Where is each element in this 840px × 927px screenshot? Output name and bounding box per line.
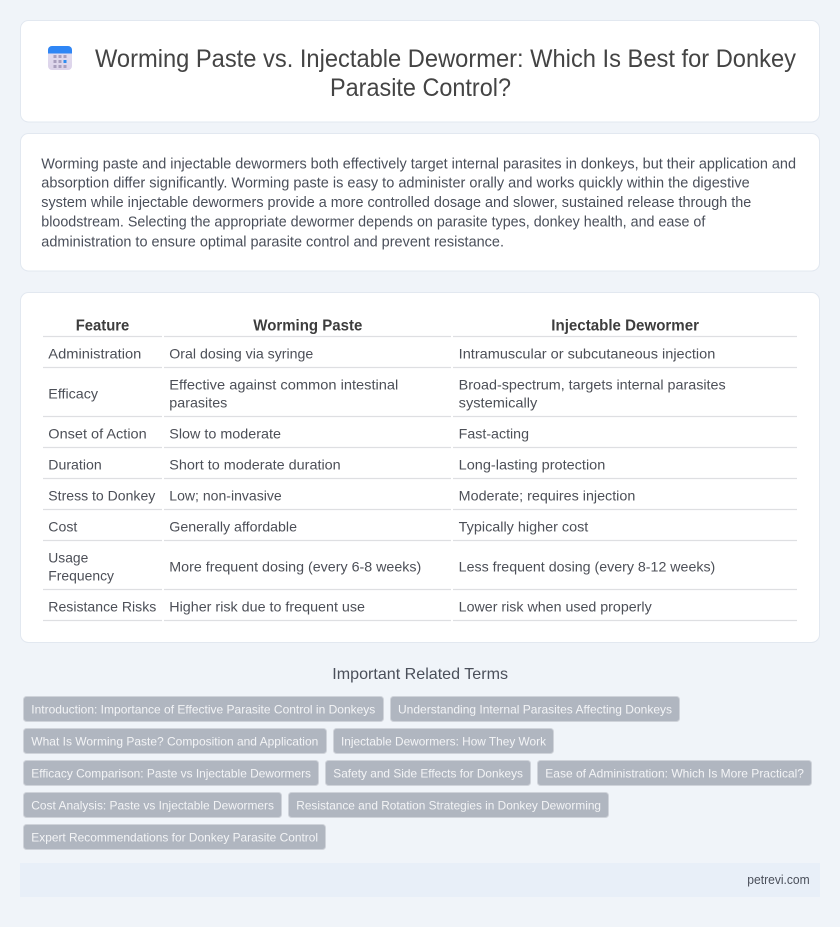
row: usage frequency [48, 549, 715, 583]
row: administration: Intramuscular or subcutaneous injection [459, 345, 715, 361]
header panel [20, 20, 820, 122]
panel: comparison table [20, 292, 820, 642]
row: cost: Typically higher cost [459, 518, 588, 534]
row: resistance risks: Resistance Risks [48, 598, 156, 614]
table rules [43, 336, 797, 620]
row: stress to donkey: Low; non-invasive [169, 487, 282, 503]
tag [334, 728, 554, 754]
tag [288, 792, 608, 818]
row: efficacy [48, 376, 726, 410]
row: duration: Short to moderate duration [169, 456, 341, 472]
intro text block: Worming paste and injectable dewormers both effectively target internal parasites in donkeys, but their application and [41, 156, 796, 172]
row: usage frequency: Usage [48, 549, 89, 565]
tag: Safety and Side Effects for Donkeys [333, 766, 523, 780]
table header row: Worming Paste [253, 318, 363, 335]
row: duration: Long-lasting protection [459, 456, 605, 472]
table header row: Injectable Dewormer [551, 318, 699, 335]
row: duration: Duration [48, 456, 102, 472]
row: cost: Generally affordable [169, 518, 297, 534]
row: usage frequency: More frequent dosing (every 6-8 weeks) [169, 558, 421, 574]
related terms tags [24, 696, 812, 850]
row: administration: Administration [48, 345, 141, 361]
footer: petrevi.com [747, 873, 810, 887]
tag [24, 728, 326, 754]
row: onset of action: Onset of Action [48, 425, 147, 441]
tag [24, 696, 384, 722]
row: administration: Oral dosing via syringe [169, 345, 314, 361]
row: cost: Cost [48, 518, 77, 534]
intro text block: bloodstream. Selecting the appropriate dewormer depends on parasite types, donkey health, and ease of [41, 215, 706, 231]
tag [24, 824, 326, 850]
tag: Understanding Internal Parasites Affecting Donkeys [398, 702, 672, 716]
tag [390, 696, 680, 722]
row: onset of action [48, 425, 529, 441]
row: usage frequency: Less frequent dosing (every 8-12 weeks) [459, 558, 715, 574]
tag: Expert Recommendations for Donkey Parasite Control [31, 830, 318, 844]
title [95, 45, 796, 102]
row: resistance risks: Higher risk due to frequent use [169, 598, 365, 614]
intro text block: administration to ensure optimal parasite control and prevent resistance. [41, 234, 504, 250]
row: onset of action: Fast-acting [459, 425, 529, 441]
row: stress to donkey: Stress to Donkey [48, 487, 155, 503]
row: efficacy: Effective against common intestinal [169, 376, 398, 392]
row: duration [48, 456, 605, 472]
panel: introduction [20, 134, 820, 271]
row: resistance risks: Lower risk when used properly [459, 598, 652, 614]
row: efficacy: Efficacy [48, 385, 98, 401]
row: cost [48, 518, 588, 534]
intro text block [41, 156, 796, 250]
icon: calendar [48, 46, 72, 70]
tag: Resistance and Rotation Strategies in Donkey Deworming [296, 798, 601, 812]
tag [326, 760, 530, 786]
tag: Cost Analysis: Paste vs Injectable Dewormers [31, 798, 274, 812]
tag: Injectable Dewormers: How They Work [341, 734, 547, 748]
footer [20, 863, 820, 897]
table header row: Feature [76, 318, 130, 335]
title: Parasite Control? [330, 74, 511, 102]
tag [24, 760, 318, 786]
intro text block: absorption differ significantly. Worming paste is easy to administer orally and works quickly within the digestive [41, 176, 750, 192]
row: efficacy: systemically [459, 394, 537, 410]
row: administration [48, 345, 715, 361]
row: resistance risks [48, 598, 652, 614]
row: stress to donkey [48, 487, 635, 503]
intro text block: system while injectable dewormers provide a more controlled dosage and slower, sustained release through the [41, 195, 751, 211]
row: efficacy: Broad-spectrum, targets internal parasites [459, 376, 726, 392]
row: stress to donkey: Moderate; requires injection [459, 487, 635, 503]
row: usage frequency: Frequency [48, 567, 114, 583]
table header row [76, 318, 699, 335]
heading: important related terms: Important Related Terms [332, 666, 508, 683]
tag: Efficacy Comparison: Paste vs Injectable Dewormers [31, 766, 311, 780]
tag [24, 792, 282, 818]
tag: Ease of Administration: Which Is More Practical? [545, 766, 804, 780]
tag [538, 760, 812, 786]
tag: What Is Worming Paste? Composition and Application [31, 734, 318, 748]
row: efficacy: parasites [169, 394, 227, 410]
tag: Introduction: Importance of Effective Parasite Control in Donkeys [31, 702, 375, 716]
row: onset of action: Slow to moderate [169, 425, 281, 441]
title: Worming Paste vs. Injectable Dewormer: Which Is Best for Donkey [95, 45, 796, 73]
